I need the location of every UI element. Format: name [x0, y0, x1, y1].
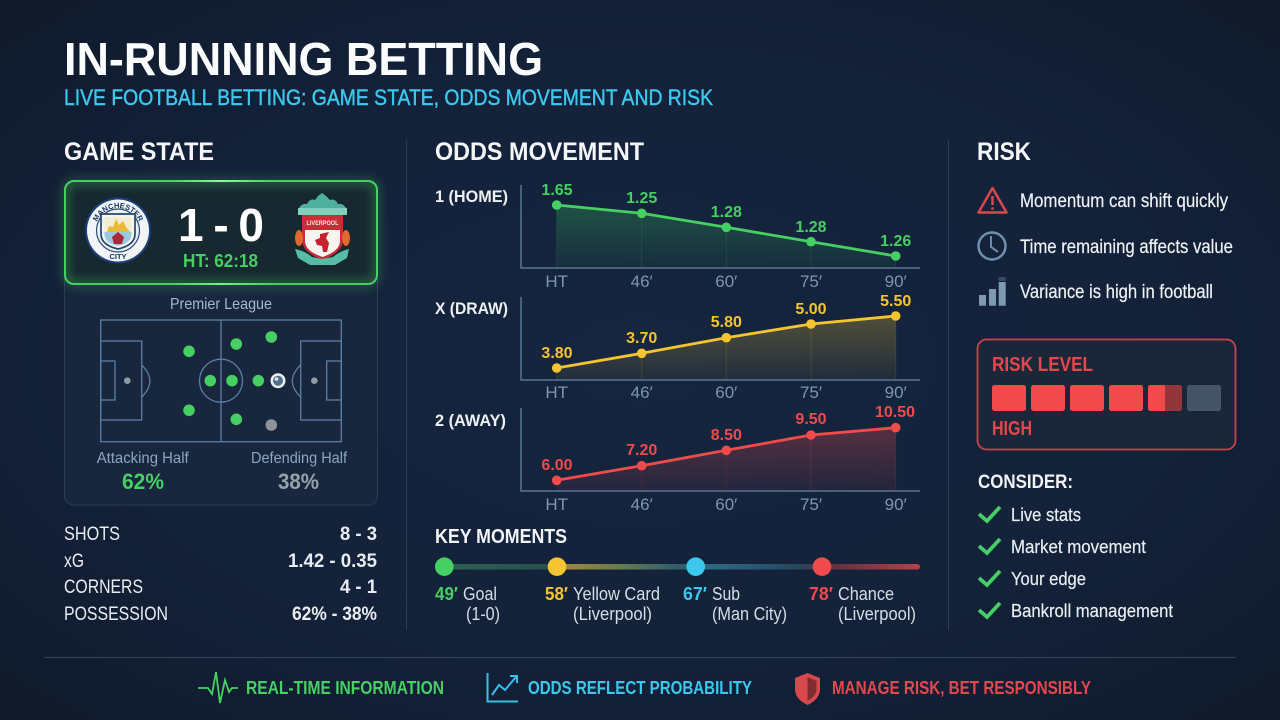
- chart: home odds: 75′: [800, 272, 822, 291]
- chart: home odds: 1.26: [880, 233, 911, 250]
- match stats: 4 - 1: [340, 577, 377, 598]
- heading: consider: CONSIDER:: [978, 472, 1073, 493]
- chart: home odds: 1.25: [626, 190, 657, 207]
- icon: Manchester City crest: MANCHESTER: [92, 202, 143, 222]
- subtitle: LIVE FOOTBALL BETTING: GAME STATE, ODDS MOVEMENT AND RISK: [64, 85, 713, 110]
- moment: substitution: [683, 584, 787, 624]
- checklist: Market movement: [1011, 536, 1146, 557]
- icon: Liverpool crest: LIVERPOOL: [306, 221, 339, 227]
- match stats: [64, 524, 377, 625]
- chart: draw odds: 46′: [631, 383, 653, 402]
- chart: away odds: HT: [545, 495, 568, 514]
- icon: ball: [270, 373, 286, 388]
- chart: home odds: 1.28: [711, 204, 742, 221]
- risk text: momentum: Momentum can shift quickly: [1020, 191, 1228, 212]
- attacking half stat: [97, 450, 189, 494]
- moment: goal: [435, 584, 500, 624]
- chart: draw odds: X (DRAW): [435, 299, 508, 318]
- title: IN-RUNNING BETTING: [64, 33, 543, 85]
- icon: shield: [795, 673, 820, 705]
- moment: goal: Goal: [463, 584, 497, 604]
- risk level card: RISK LEVEL: [992, 354, 1093, 376]
- checklist: Live stats: [1011, 504, 1081, 525]
- match stats: xG: [64, 551, 84, 572]
- match stats: 62% - 38%: [292, 604, 377, 625]
- score panel: [57, 173, 385, 292]
- moment: chance: Chance: [838, 584, 894, 604]
- chart: draw odds: 5.00: [795, 301, 827, 318]
- moment: chance: 78′: [809, 584, 833, 604]
- heading: risk: RISK: [977, 138, 1031, 166]
- chart: home odds: 1.28: [795, 219, 827, 236]
- chart: draw odds: 90′: [885, 383, 907, 402]
- timeline: key moments: [435, 557, 920, 624]
- footer text: odds reflect probability: ODDS REFLECT PROBABILITY: [528, 678, 752, 698]
- risk level card: [978, 340, 1236, 450]
- label: Premier League: Premier League: [170, 296, 272, 313]
- moment: yellow card: Yellow Card: [573, 584, 660, 604]
- risk text: time: Time remaining affects value: [1020, 237, 1233, 258]
- chart: away odds: 75′: [800, 495, 822, 514]
- moment: substitution: (Man City): [712, 604, 787, 624]
- chart: home odds: 1 (HOME): [435, 187, 508, 206]
- defending half stat: [251, 450, 348, 494]
- moment: substitution: 67′: [683, 584, 707, 604]
- chart: away odds: 10.50: [875, 404, 915, 421]
- chart: away odds: 8.50: [711, 427, 742, 444]
- moment: chance: [809, 584, 916, 624]
- chart: home odds: 60′: [715, 272, 737, 291]
- icon: heartbeat: [198, 672, 238, 703]
- chart: draw odds: 3.70: [626, 330, 657, 347]
- chart: home odds: HT: [545, 272, 568, 291]
- match clock: HT: 62:18: [183, 251, 258, 271]
- defending half stat: 38%: [278, 469, 319, 494]
- moment: yellow card: (Liverpool): [573, 604, 652, 624]
- footer text: real-time information: REAL-TIME INFORMATION: [246, 678, 444, 698]
- attacking half stat: Attacking Half: [97, 450, 189, 467]
- chart: away odds: 7.20: [626, 442, 657, 459]
- heading: key moments: KEY MOMENTS: [435, 526, 567, 548]
- risk meter: [992, 385, 1221, 411]
- match stats: SHOTS: [64, 524, 120, 545]
- chart: draw odds: 75′: [800, 383, 822, 402]
- chart: draw odds: 5.50: [880, 293, 911, 310]
- icon: warning triangle: [978, 188, 1006, 212]
- panel: risk: [977, 138, 1236, 621]
- moment: goal: 49′: [435, 584, 458, 604]
- chart: away odds: 90′: [885, 495, 907, 514]
- panel: game state: [57, 138, 385, 625]
- panel: pitch card: [64, 270, 378, 505]
- chart: draw odds: 3.80: [541, 345, 573, 362]
- moment: chance: (Liverpool): [838, 604, 916, 624]
- match stats: POSSESSION: [64, 604, 168, 625]
- chart: draw odds: 60′: [715, 383, 737, 402]
- moment: yellow card: [545, 584, 660, 624]
- match stats: 8 - 3: [340, 524, 377, 545]
- checklist: Bankroll management: [1011, 600, 1173, 621]
- moment: goal: (1-0): [466, 604, 500, 624]
- chart: away odds: [435, 404, 920, 514]
- panel: odds movement: [435, 138, 920, 624]
- icon: Liverpool crest: [295, 193, 350, 265]
- chart: away odds: 2 (AWAY): [435, 411, 506, 430]
- chart: home odds: 90′: [885, 272, 907, 291]
- chart: away odds: 60′: [715, 495, 737, 514]
- chart: away odds: 46′: [631, 495, 653, 514]
- checklist: [979, 504, 1173, 621]
- risk level card: HIGH: [992, 418, 1032, 440]
- chart: away odds: 9.50: [795, 411, 827, 428]
- chart: home odds: 1.65: [541, 182, 573, 199]
- defending half stat: Defending Half: [251, 450, 348, 467]
- heading: odds movement: ODDS MOVEMENT: [435, 138, 644, 166]
- attacking half stat: 62%: [122, 469, 164, 494]
- icon: Manchester City crest: CITY: [109, 252, 127, 261]
- icon: clock: [978, 232, 1006, 260]
- chart: home odds: 46′: [631, 272, 653, 291]
- icon: bars: [979, 277, 1006, 306]
- match stats: 1.42 - 0.35: [288, 551, 377, 572]
- moment: yellow card: 58′: [545, 584, 568, 604]
- icon: Manchester City crest: [85, 198, 151, 264]
- chart: away odds: 6.00: [541, 457, 573, 474]
- chart: draw odds: [435, 293, 920, 402]
- moment: substitution: Sub: [712, 584, 740, 604]
- footer: [198, 672, 1091, 705]
- chart: home odds: [435, 182, 920, 291]
- pitch diagram: [101, 320, 341, 442]
- heading: game state: GAME STATE: [64, 138, 214, 166]
- match stats: CORNERS: [64, 577, 143, 598]
- chart: draw odds: HT: [545, 383, 568, 402]
- checklist: Your edge: [1011, 568, 1086, 589]
- risk text: variance: Variance is high in football: [1020, 282, 1213, 303]
- footer text: manage risk: MANAGE RISK, BET RESPONSIBLY: [832, 678, 1091, 698]
- icon: rising chart: [488, 673, 518, 702]
- chart: draw odds: 5.80: [711, 314, 742, 331]
- score: 1 - 0: [178, 199, 264, 251]
- player markers: [183, 331, 277, 425]
